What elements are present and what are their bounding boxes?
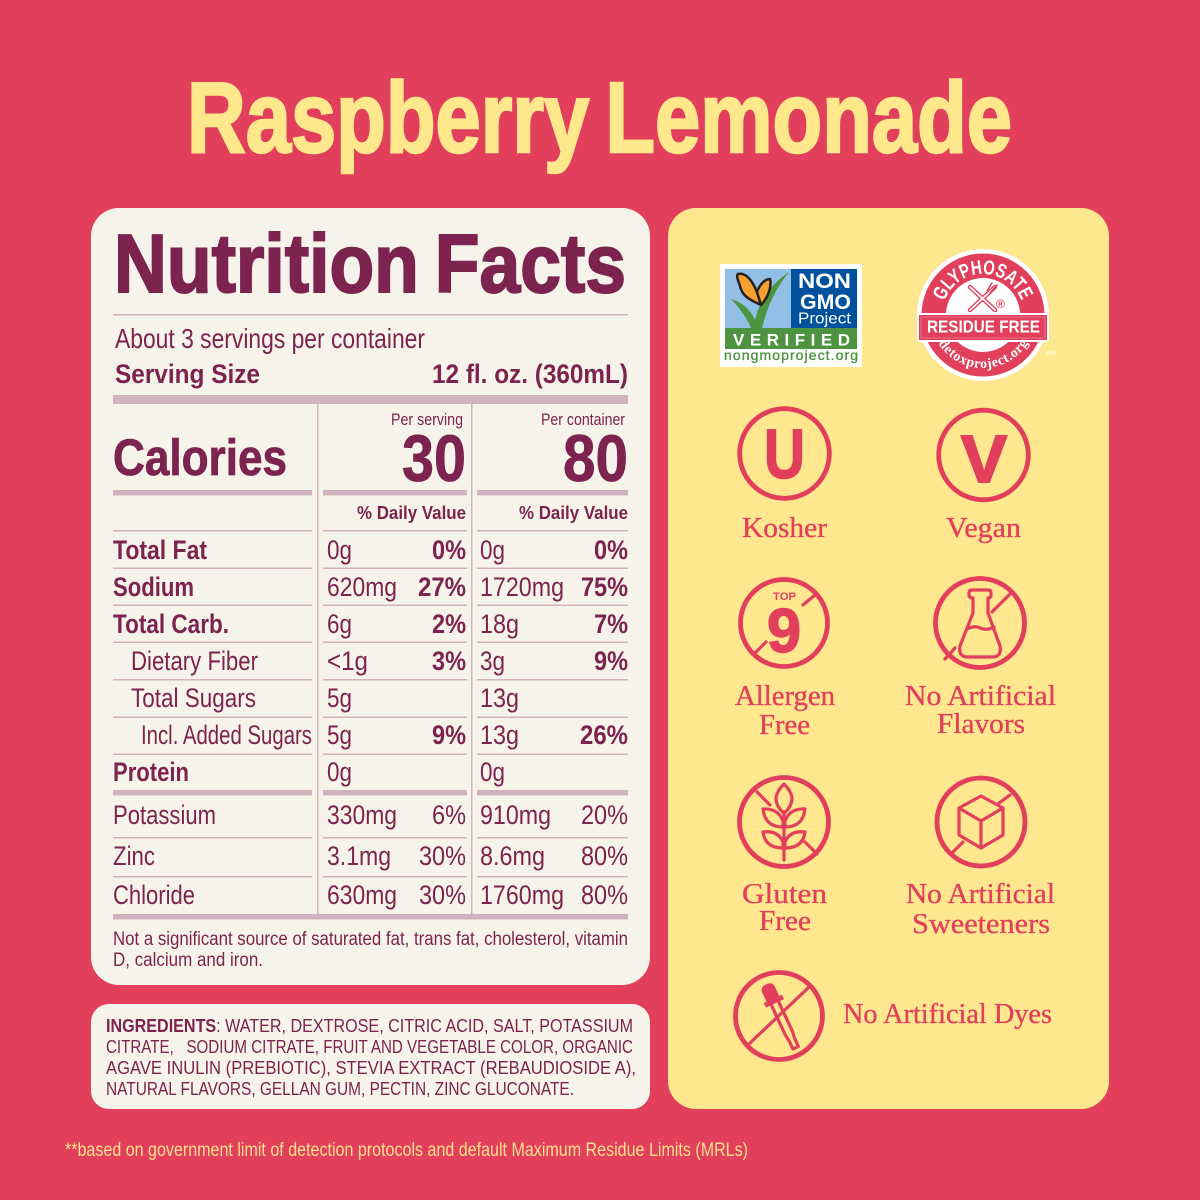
row: total fat: 0% (432, 535, 466, 565)
row: potassium: Potassium (113, 800, 216, 830)
row: total fat: Total Fat (113, 535, 207, 565)
row: chloride: 30% (419, 880, 466, 910)
badge: no artificial dyes (736, 972, 1052, 1060)
row: zinc: 8.6mg (480, 841, 545, 871)
row: protein: 0g (480, 757, 505, 787)
panel: nutrition facts (91, 208, 650, 985)
row: added sugars: 5g (327, 720, 352, 750)
row: sodium: 620mg (327, 572, 397, 602)
heading: nutrition facts: Nutrition Facts (114, 217, 626, 310)
servings per container: About 3 servings per container (115, 323, 425, 354)
row: total carb: 6g (327, 609, 352, 639)
icon: glyphosate residue free badge: detoxproject.org (939, 339, 1030, 371)
badge: vegan: V (961, 422, 1007, 497)
row: total carb: 18g (480, 609, 519, 639)
row: total fat: 0g (327, 535, 352, 565)
icon: non gmo project badge: Project (798, 310, 852, 328)
badge: vegan: Vegan (946, 512, 1022, 544)
badge: no artificial flavors (905, 578, 1056, 740)
row: sodium: 75% (581, 572, 628, 602)
badge: kosher: Kosher (742, 512, 827, 544)
row: chloride: 630mg (327, 880, 397, 910)
row: dietary fiber: <1g (327, 646, 368, 676)
row: protein (113, 757, 505, 787)
badge: allergen free: Free (759, 709, 810, 741)
badge: kosher: U (764, 415, 805, 493)
row: total carb (113, 609, 628, 639)
daily value header: % Daily Value (357, 503, 466, 523)
panel: ingredients: AGAVE INULIN (PREBIOTIC), STEVIA EXTRACT (REBAUDIOSIDE A), (106, 1058, 636, 1078)
row: zinc: Zinc (113, 841, 155, 871)
row: total sugars: 5g (327, 683, 352, 713)
icon: glyphosate residue free badge: ® (996, 297, 1005, 311)
row: sodium (113, 572, 628, 602)
serving size (115, 359, 628, 389)
badge: gluten free: Free (759, 905, 811, 937)
badge: gluten free (740, 778, 828, 937)
row: total sugars: 13g (480, 683, 519, 713)
row: total sugars (131, 683, 519, 713)
serving size: 12 fl. oz. (360mL) (432, 359, 628, 389)
icon: non gmo project badge: VERIFIED (733, 330, 850, 350)
row: added sugars: 13g (480, 720, 519, 750)
row: total fat: 0% (594, 535, 628, 565)
badge: no artificial sweeteners: No Artificial (906, 878, 1055, 910)
calories row: Per serving (391, 411, 463, 429)
row: chloride: 1760mg (480, 880, 564, 910)
row: sodium: Sodium (113, 572, 194, 602)
icon: glyphosate residue free badge: RESIDUE FREE (927, 316, 1040, 336)
badge: no artificial sweeteners (906, 778, 1055, 940)
row: added sugars: Incl. Added Sugars (141, 720, 312, 750)
row: total sugars: Total Sugars (131, 683, 256, 713)
panel: certifications (668, 208, 1109, 1109)
panel: ingredients: CITRATE, SODIUM CITRATE, FRUIT AND VEGETABLE COLOR, ORGANIC (106, 1037, 633, 1057)
badge: vegan (939, 410, 1028, 544)
calories row: Calories (113, 429, 287, 486)
badge: no artificial sweeteners: Sweeteners (912, 908, 1050, 940)
row: chloride: 80% (581, 880, 628, 910)
daily value header (357, 503, 628, 523)
row: dietary fiber: Dietary Fiber (131, 646, 258, 676)
row: protein: Protein (113, 757, 189, 787)
row: dietary fiber: 3g (480, 646, 505, 676)
daily value header: % Daily Value (519, 503, 628, 523)
badge: allergen free: Allergen (735, 680, 835, 712)
serving size: Serving Size (115, 359, 260, 389)
row: potassium (113, 800, 628, 830)
panel: ingredients: NATURAL FLAVORS, GELLAN GUM, PECTIN, ZINC GLUCONATE. (106, 1079, 574, 1099)
row: potassium: 6% (432, 800, 466, 830)
row: chloride: Chloride (113, 880, 195, 910)
row: zinc: 80% (581, 841, 628, 871)
icon: non gmo project badge: GMO (800, 291, 851, 314)
badge: no artificial flavors: No Artificial (905, 680, 1056, 712)
row: added sugars: 9% (432, 720, 466, 750)
row: dietary fiber: 3% (432, 646, 466, 676)
row: total carb: 7% (594, 609, 628, 639)
row: chloride (113, 880, 628, 910)
icon: non gmo project badge: NON (798, 270, 851, 293)
row: potassium: 910mg (480, 800, 551, 830)
icon: non gmo project badge (720, 264, 862, 367)
badge: no artificial flavors: Flavors (937, 708, 1025, 740)
calories row: Per container (541, 411, 625, 429)
icon: glyphosate residue free badge: ** (1045, 347, 1057, 364)
icon: non gmo project badge: nongmoproject.org (724, 347, 858, 363)
badge: allergen free: TOP (773, 591, 796, 603)
row: protein: 0g (327, 757, 352, 787)
row: dietary fiber: 9% (594, 646, 628, 676)
title: Raspberry Lemonade (187, 62, 1012, 174)
badge: allergen free (735, 580, 835, 741)
row: potassium: 20% (581, 800, 628, 830)
calories row (113, 411, 628, 495)
row: total carb: Total Carb. (113, 609, 229, 639)
row: total carb: 2% (432, 609, 466, 639)
row: zinc (113, 841, 628, 871)
calories row: 80 (563, 421, 628, 495)
footnote: not a significant source: D, calcium and iron. (113, 950, 263, 971)
icon: glyphosate residue free badge (917, 249, 1057, 381)
badge: no artificial dyes: No Artificial Dyes (843, 998, 1052, 1030)
row: added sugars: 26% (580, 720, 628, 750)
row: total fat: 0g (480, 535, 505, 565)
footnote: not a significant source: Not a significant source of saturated fat, trans fat, cholesterol, vitamin (113, 929, 628, 950)
row: zinc: 30% (419, 841, 466, 871)
row: potassium: 330mg (327, 800, 397, 830)
row: total fat (113, 535, 628, 565)
badge: gluten free: Gluten (742, 878, 828, 910)
panel: ingredients: INGREDIENTS: WATER, DEXTROSE, CITRIC ACID, SALT, POTASSIUM (106, 1016, 633, 1036)
calories row: 30 (402, 421, 466, 495)
row: dietary fiber (131, 646, 628, 676)
footnote: not a significant source (113, 929, 628, 971)
row: zinc: 3.1mg (327, 841, 391, 871)
icon: glyphosate residue free badge: GLYPHOSATE (934, 260, 1034, 300)
row: added sugars (141, 720, 628, 750)
badge: allergen free: 9 (767, 597, 801, 666)
row: sodium: 1720mg (480, 572, 564, 602)
badge: kosher (740, 409, 829, 544)
row: sodium: 27% (418, 572, 466, 602)
panel: ingredients (91, 1004, 650, 1109)
footnote: residue limits: **based on government limit of detection protocols and default Maximum Residue Limits (MRLs) (65, 1140, 748, 1161)
